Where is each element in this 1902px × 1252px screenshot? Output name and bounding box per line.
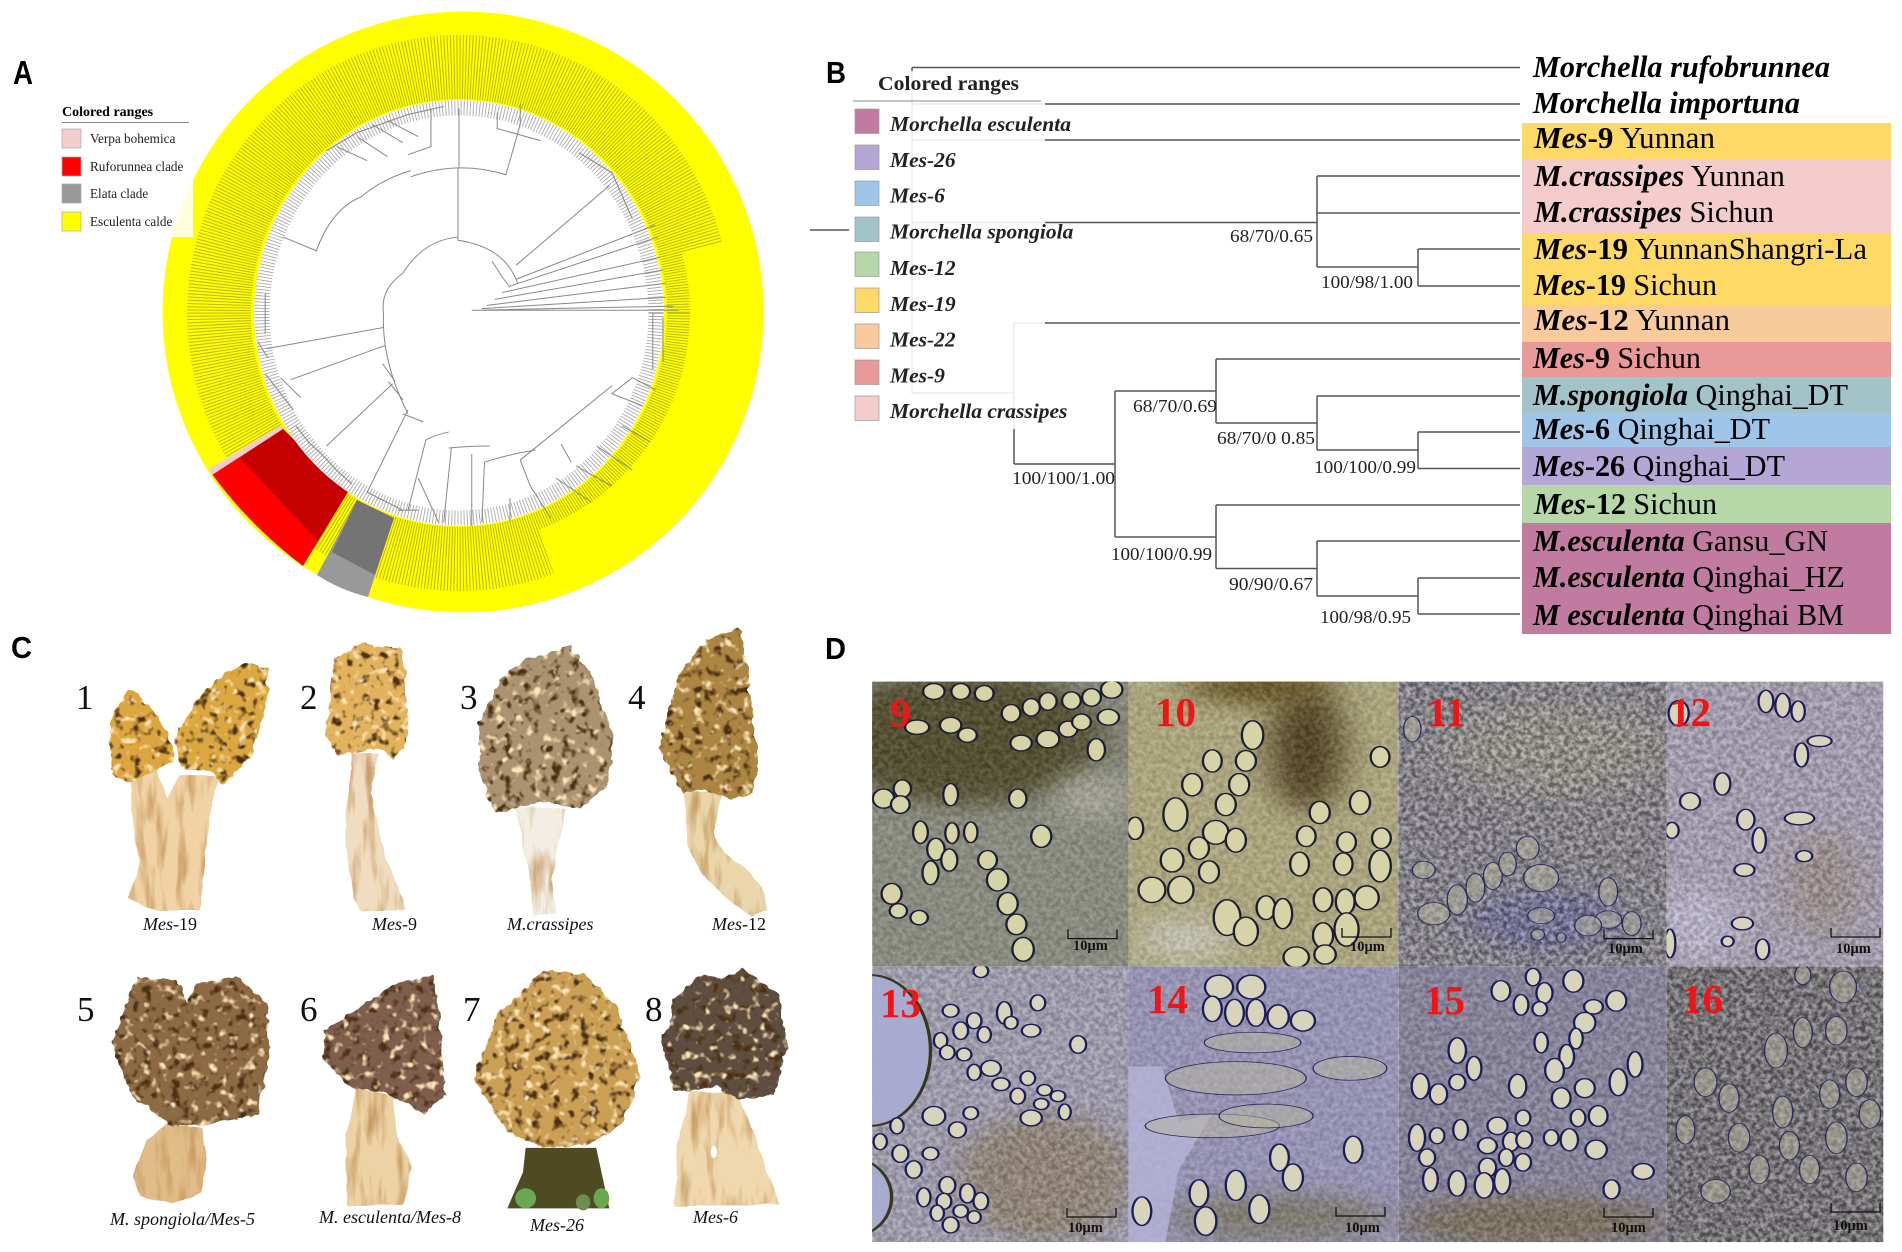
mushroom 1: Mes-19 bbox=[110, 662, 268, 911]
specimen numbers: 3 bbox=[460, 678, 478, 717]
legend item Mes-9 bbox=[855, 360, 945, 388]
legend title: Colored ranges bbox=[878, 73, 1019, 95]
specimen numbers: 8 bbox=[645, 990, 662, 1029]
legend item Morchella spongiola: Morchella spongiola bbox=[889, 220, 1074, 244]
micrograph panel numbers bbox=[880, 689, 1723, 1026]
bootstrap support values bbox=[1012, 226, 1416, 627]
micrograph 13 bbox=[872, 966, 1128, 1242]
taxon labels: Mes-9 Yunnan bbox=[1533, 120, 1715, 155]
short labels cover on the right side bbox=[549, 245, 721, 559]
micrograph panel numbers: 9 bbox=[890, 690, 910, 736]
legend item Mes-9: Mes-9 bbox=[889, 364, 945, 388]
taxon labels: Mes-19 Sichun bbox=[1533, 267, 1717, 302]
white tree interior bbox=[254, 100, 664, 526]
scale bars bbox=[1067, 928, 1880, 1217]
mushroom illustrations bbox=[110, 628, 787, 1210]
legend: colored ranges bbox=[56, 100, 193, 237]
panel C: morel fruiting bodies bbox=[11, 628, 787, 1235]
specimen numbers bbox=[76, 678, 662, 1029]
taxon labels: M.spongiola Qinghai_DT bbox=[1532, 377, 1848, 412]
bootstrap support values: 68/70/0.65 bbox=[1230, 226, 1313, 246]
micrograph panel numbers: 11 bbox=[1427, 689, 1466, 735]
legend item Mes-12: Mes-12 bbox=[889, 256, 956, 280]
specimen captions: M. esculenta/Mes-8 bbox=[318, 1207, 461, 1227]
dark labels inside the grey wedge bbox=[332, 500, 394, 575]
scale bar labels: 10μm bbox=[1611, 1220, 1646, 1236]
mushroom 3: M.crassipes bbox=[479, 646, 615, 916]
specimen captions: Mes-6 bbox=[692, 1207, 738, 1227]
specimen captions: Mes-9 bbox=[371, 914, 417, 934]
pink Verpa bohemica strip bbox=[209, 425, 283, 475]
bootstrap support values: 100/100/0.99 bbox=[1111, 544, 1212, 564]
mushroom 4: Mes-12 bbox=[659, 628, 768, 916]
bootstrap support values: 68/70/0.69 bbox=[1133, 396, 1217, 416]
panel letter D: D bbox=[825, 631, 846, 666]
micrograph panel numbers: 14 bbox=[1147, 976, 1188, 1022]
mushroom 7: Mes-26 bbox=[473, 971, 641, 1210]
legend title: Colored ranges bbox=[62, 105, 154, 120]
scale bar labels: 10μm bbox=[1068, 1220, 1103, 1236]
taxon labels: Morchella importuna bbox=[1532, 85, 1800, 120]
panel D: ascospore micrographs bbox=[808, 631, 1883, 1245]
micrograph 15 bbox=[1398, 966, 1666, 1242]
legend item Mes-6: Mes-6 bbox=[889, 184, 945, 208]
taxon labels: Mes-12 Yunnan bbox=[1533, 302, 1730, 337]
legend item Mes-19 bbox=[855, 288, 956, 316]
panel B: rectangular phylogenetic tree bbox=[810, 49, 1891, 634]
micrograph 9 bbox=[872, 682, 1128, 966]
bootstrap support values: 68/70/0 0.85 bbox=[1217, 428, 1315, 448]
specimen captions: Mes-12 bbox=[711, 914, 766, 934]
taxon labels: Mes-9 Sichun bbox=[1532, 340, 1701, 375]
legend item Esculenta calde: Esculenta calde bbox=[90, 214, 173, 229]
specimen numbers: 4 bbox=[628, 678, 646, 717]
legend item Verpa bohemica: Verpa bohemica bbox=[90, 131, 175, 146]
taxon labels: M.crassipes Yunnan bbox=[1533, 158, 1785, 193]
specimen captions: Mes-19 bbox=[142, 914, 197, 934]
red Ruforunnea clade wedge bbox=[212, 429, 348, 566]
micrograph panel numbers: 13 bbox=[880, 980, 921, 1026]
legend item Elata clade: Elata clade bbox=[90, 186, 148, 201]
yellow Esculenta clade ring bbox=[162, 12, 764, 612]
mushroom 2: Mes-9 bbox=[324, 644, 408, 911]
micrograph panel numbers: 10 bbox=[1155, 689, 1196, 735]
bootstrap support values: 100/98/0.95 bbox=[1320, 607, 1411, 627]
panel letter A: A bbox=[13, 54, 33, 91]
taxon labels: Mes-12 Sichun bbox=[1533, 486, 1717, 521]
legend item Mes-26 bbox=[855, 145, 956, 172]
taxon labels: Morchella rufobrunnea bbox=[1532, 49, 1830, 84]
taxon labels: M.esculenta Gansu_GN bbox=[1532, 523, 1828, 558]
micrograph 12 bbox=[1666, 682, 1884, 966]
legend item Mes-6 bbox=[855, 181, 945, 208]
specimen numbers: 6 bbox=[300, 990, 318, 1029]
legend item Mes-12 bbox=[855, 252, 956, 280]
panel A: circular phylogenetic tree bbox=[13, 12, 764, 612]
mushroom 8: Mes-6 bbox=[662, 969, 787, 1206]
taxon labels bbox=[1532, 49, 1867, 632]
taxon labels: M.crassipes Sichun bbox=[1533, 194, 1774, 229]
scale bar labels: 10μm bbox=[1833, 1218, 1868, 1234]
specimen captions: M.crassipes bbox=[506, 914, 594, 934]
legend item Ruforunnea clade: Ruforunnea clade bbox=[90, 159, 184, 174]
scale bar labels: 10μm bbox=[1608, 941, 1643, 957]
specimen numbers: 2 bbox=[300, 678, 318, 717]
legend item Morchella esculenta: Morchella esculenta bbox=[889, 112, 1071, 136]
mushroom 6: M. esculenta bbox=[324, 975, 445, 1206]
radial tip comb bbox=[262, 108, 656, 518]
micrograph panel numbers: 15 bbox=[1424, 977, 1465, 1023]
legend item Mes-19: Mes-19 bbox=[889, 292, 956, 316]
legend item Mes-26: Mes-26 bbox=[889, 148, 956, 172]
taxon labels: Mes-26 Qinghai_DT bbox=[1532, 448, 1785, 483]
scale bar labels: 10μm bbox=[1345, 1220, 1380, 1236]
mushroom 5: M. spongiola bbox=[112, 977, 269, 1204]
specimen numbers: 1 bbox=[76, 678, 94, 717]
panel letter C: C bbox=[11, 630, 32, 665]
tree branches bbox=[258, 104, 678, 526]
micrograph 11 bbox=[1398, 682, 1667, 966]
legend item Morchella crassipes: Morchella crassipes bbox=[889, 399, 1067, 423]
micrograph panel numbers: 16 bbox=[1682, 976, 1723, 1022]
specimen captions: Mes-26 bbox=[529, 1215, 584, 1235]
taxon labels: M esculenta Qinghai BM bbox=[1532, 597, 1844, 632]
scale bar labels bbox=[1068, 938, 1871, 1236]
legend item Mes-22: Mes-22 bbox=[889, 328, 956, 352]
bootstrap support values: 100/98/1.00 bbox=[1321, 272, 1413, 292]
specimen numbers: 5 bbox=[77, 990, 94, 1029]
bootstrap support values: 100/100/1.00 bbox=[1012, 468, 1115, 488]
tree branches bbox=[810, 68, 1520, 614]
taxon labels: M.esculenta Qinghai_HZ bbox=[1532, 559, 1845, 594]
taxon label band bbox=[219, 67, 699, 559]
specimen captions: M. spongiola/Mes-5 bbox=[109, 1209, 255, 1229]
legend item Mes-22 bbox=[855, 324, 956, 352]
specimen numbers: 7 bbox=[463, 990, 480, 1029]
grey Elata clade wedge bbox=[317, 500, 394, 597]
micrograph 10 bbox=[1128, 682, 1398, 966]
panel letter B: B bbox=[826, 55, 846, 90]
micrograph panel numbers: 12 bbox=[1670, 689, 1711, 735]
bootstrap support values: 100/100/0.99 bbox=[1314, 457, 1416, 477]
dark labels inside the red wedge bbox=[240, 429, 348, 541]
scale bar labels: 10μm bbox=[1073, 938, 1108, 954]
scale bar labels: 10μm bbox=[1836, 941, 1871, 957]
legend: colored ranges bbox=[849, 71, 1074, 429]
micrograph 14 bbox=[1128, 966, 1398, 1242]
specimen captions bbox=[109, 914, 766, 1235]
scale bar labels: 10μm bbox=[1350, 939, 1385, 955]
colored row backgrounds bbox=[1522, 123, 1891, 634]
bootstrap support values: 90/90/0.67 bbox=[1229, 574, 1313, 594]
micrograph 16 bbox=[1666, 966, 1884, 1242]
taxon labels: Mes-19 YunnanShangri-La bbox=[1533, 231, 1867, 266]
taxon labels: Mes-6 Qinghai_DT bbox=[1532, 411, 1770, 446]
